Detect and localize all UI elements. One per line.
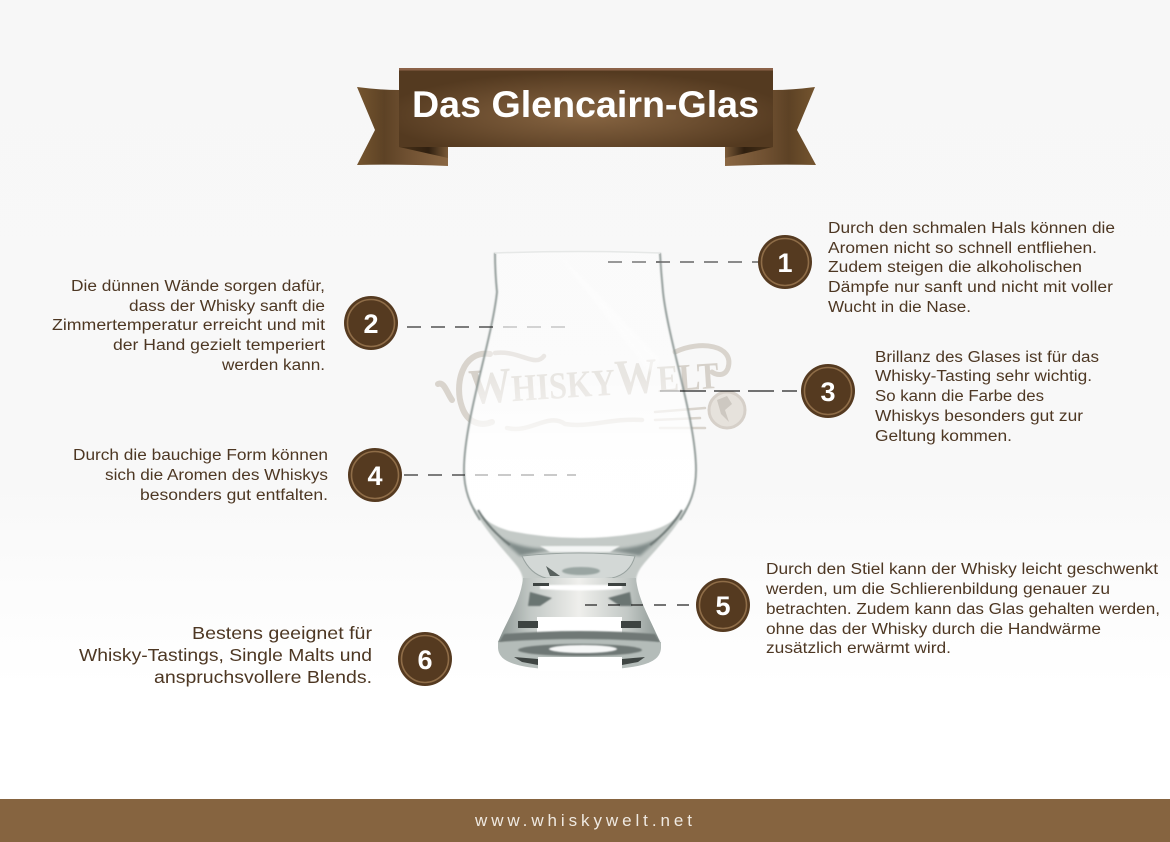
text: narrow neck: Dämpfe nur sanft und nicht mit voller — [828, 279, 1113, 296]
badge 2 — [344, 296, 398, 350]
banner left tail — [357, 87, 448, 166]
leader 2 — [407, 326, 565, 328]
text: bulbous shape: sich die Aromen des Whiskys — [105, 467, 328, 484]
badge 4: 4 — [367, 461, 383, 491]
text: narrow neck — [828, 220, 1115, 316]
glass outline — [464, 253, 497, 520]
text: stem: Durch den Stiel kann der Whisky leicht geschwenkt — [766, 561, 1159, 578]
title: Das Glencairn-Glas — [412, 84, 759, 125]
glass body — [464, 252, 696, 670]
text: narrow neck: Durch den schmalen Hals können die — [828, 220, 1115, 237]
text: thin walls — [52, 278, 326, 374]
glass stem — [498, 578, 660, 642]
text: brilliance — [875, 349, 1099, 445]
text: stem: betrachten. Zudem kann das Glas gehalten werden, — [766, 601, 1160, 618]
glass highlight — [560, 256, 660, 372]
watermark logo — [438, 343, 745, 429]
leader 4 — [404, 474, 576, 476]
text: stem: zusätzlich erwärmt wird. — [766, 640, 951, 657]
watermark globe — [709, 392, 745, 428]
text: thin walls: der Hand gezielt temperiert — [113, 337, 326, 354]
glass foot — [498, 636, 661, 671]
banner main panel — [399, 68, 773, 147]
title banner — [357, 68, 816, 166]
text: brilliance: So kann die Farbe des — [875, 388, 1044, 405]
text: thin walls: Zimmertemperatur erreicht und mit — [52, 317, 326, 334]
banner right fold — [725, 147, 773, 158]
banner right tail — [725, 87, 816, 166]
text: bulbous shape — [73, 447, 328, 504]
badge 3: 3 — [820, 377, 836, 407]
text: brilliance: Brillanz des Glases ist für das — [875, 349, 1099, 366]
glass inner floor — [522, 553, 635, 580]
text: brilliance: Geltung kommen. — [875, 428, 1012, 445]
glass bowl shadows — [500, 538, 660, 556]
leader 1 — [608, 261, 760, 263]
glass lower bowl — [466, 490, 694, 580]
text: stem — [765, 561, 1160, 657]
badge 3 — [801, 364, 855, 418]
text: thin walls: Die dünnen Wände sorgen dafür, — [71, 278, 325, 295]
banner left fold — [399, 147, 448, 158]
footer url: www.whiskywelt.net — [474, 811, 692, 830]
badge 4 — [348, 448, 402, 502]
text: narrow neck: Aromen nicht so schnell entfliehen. — [828, 240, 1097, 257]
badge 1: 1 — [777, 248, 793, 278]
text: best suited: Bestens geeignet für — [192, 623, 372, 643]
footer bar — [0, 799, 1170, 842]
text: thin walls: werden kann. — [221, 357, 325, 374]
text: best suited: Whisky-Tastings, Single Malts und — [79, 645, 372, 665]
text: stem: werden, um die Schlierenbildung genauer zu — [765, 581, 1110, 598]
leader 5 — [585, 604, 690, 606]
text: brilliance: Whiskys besonders gut zur — [875, 408, 1083, 425]
badge 6 — [398, 632, 452, 686]
badge 5 — [696, 578, 750, 632]
watermark wordmark: WHISKYWELT — [467, 343, 720, 415]
leader 3 — [660, 390, 797, 392]
glass illustration — [464, 252, 696, 671]
text: stem: ohne das der Whisky durch die Handwärme — [766, 621, 1101, 638]
text: best suited: anspruchsvollere Blends. — [154, 667, 372, 687]
text: brilliance: Whisky-Tasting sehr wichtig. — [875, 368, 1092, 385]
badge 6: 6 — [417, 645, 433, 675]
badge 2: 2 — [363, 309, 379, 339]
text: thin walls: dass der Whisky sanft die — [129, 298, 325, 315]
text: bulbous shape: Durch die bauchige Form können — [73, 447, 328, 464]
text: best suited — [79, 623, 372, 687]
text: narrow neck: Zudem steigen die alkoholischen — [828, 259, 1082, 276]
text: narrow neck: Wucht in die Nase. — [828, 299, 971, 316]
badge 1 — [758, 235, 812, 289]
text: bulbous shape: besonders gut entfalten. — [140, 487, 328, 504]
badge 5: 5 — [715, 591, 731, 621]
